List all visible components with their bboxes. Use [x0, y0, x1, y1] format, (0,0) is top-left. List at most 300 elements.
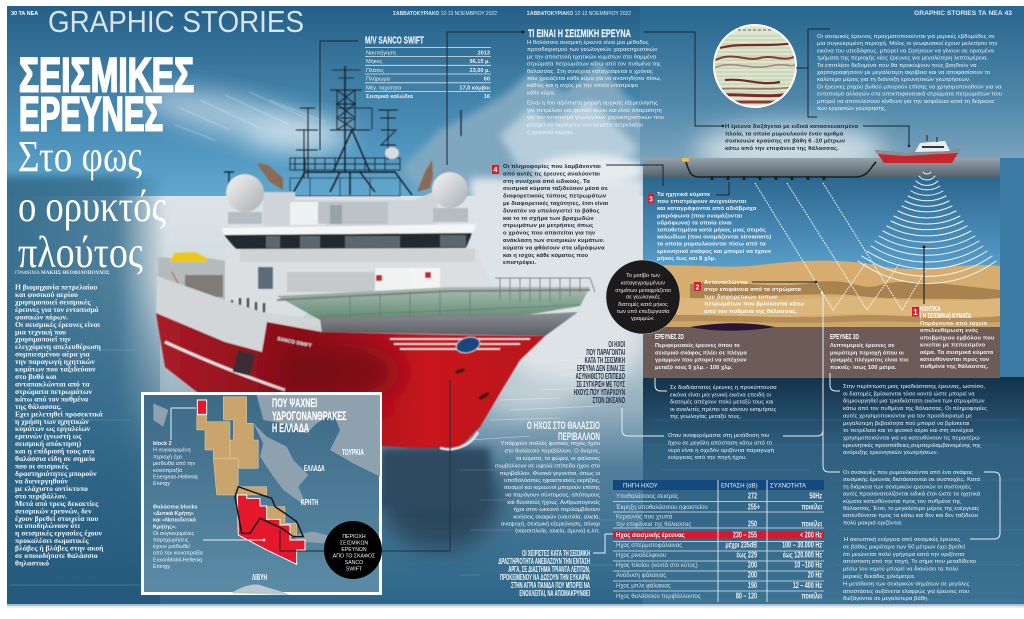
text block: seismic surveys duration: καλύτερο μέρος για τη διάνοιξη ερευνητικών γεωτρήσεων.	[817, 76, 971, 83]
bracket connector to circle	[796, 29, 830, 117]
left column intro text: να διενεργηθούν	[14, 476, 68, 485]
text block: sound sources in the sea: Υπάρχουν πολλές φυσικές πηγές ήχου	[501, 440, 600, 447]
text block: sound sources in the sea: υποθαλάσσιες ηφαιστειακές εκρήξεις,	[504, 477, 600, 484]
text block: sound sources in the sea: και δυνατούς ήχους. Ανθρωπογενείς	[507, 499, 600, 506]
step 1: sound waves	[912, 246, 996, 370]
map connectors	[171, 408, 196, 440]
text block: what is a seismic survey: με την αποστολή ηχητικών κυμάτων στα θαμμένα	[527, 53, 657, 60]
text block: what is a seismic survey: στρώματα πετρωμάτων κάτω από τον πυθμένα της	[527, 61, 661, 68]
step 3: hydrophones: υδρόφωνα) τα οποία είναι	[657, 220, 732, 226]
text block: what is a seismic survey: θάλασσας. Στη συνέχεια καταγράφεται ο χρόνος	[527, 68, 653, 75]
left column intro text: κάτω από τον πυθμένα	[15, 394, 89, 403]
step 4: information analysed: κύματα να φθάσουν στα υδρόφωνα	[503, 245, 605, 251]
left column intro text: ελεγχόμενη απελευθέρωση	[15, 342, 101, 351]
text block: seismic surveys duration: εικόνα του υπεδάφους, μπορεί να ζητήσουν να γίνουν σε ορισμένα	[817, 47, 994, 54]
stern decks with lifeboat	[158, 257, 232, 312]
left column intro text: στο βυθό και	[15, 372, 57, 381]
table: sound sources: 20 Hz	[808, 572, 822, 580]
text block: what is a seismic survey: για τον εντοπισμό γεωλογικών χαρακτηριστικών που	[527, 114, 664, 121]
text: 3D surveys explanation: ανόρυξης ερευνητικών γεωτρήσεων.	[843, 449, 939, 456]
text: 3D surveys explanation: το πετρέλαιο και το φυσικό αέριο και στη συνέχεια	[843, 427, 974, 434]
text: long-distance sound transmission: Οταν αναφερόμαστε στη μετάδοση του	[668, 432, 770, 439]
text block: sound sources in the sea: περιβάλλον. Φυσικά γεγονότα, όπως οι	[500, 470, 601, 477]
table: sound sources: 80 – 120	[736, 593, 757, 601]
map note: block 2: κοινοπραξία	[153, 468, 182, 474]
right funnel	[417, 160, 433, 192]
step 4: information analysed: με διαφορετικές ταχύτητες, έτσι είναι	[503, 201, 609, 207]
step 4: information analysed: δυνατόν να υπολογιστεί το βάθος	[503, 208, 600, 214]
step 1: sound waves: πυθμένα της θάλασσας.	[920, 364, 989, 370]
table: sound sources: έως 120.000 Hz	[783, 552, 822, 560]
step 2: reflections: πετρωμάτων που βρίσκονται κάτω	[704, 302, 804, 308]
text: acoustic energy: μέσω του νερού μπορεί να διανύσει τα πολύ	[843, 566, 958, 573]
map note: block 2: μισθωθεί από την	[153, 460, 195, 467]
panel: ship specs: Ναυπήγηση	[366, 50, 396, 56]
left column intro text: στο περιβάλλον.	[15, 491, 67, 500]
panel: ship specs: 60	[484, 76, 490, 82]
3D surveys label	[830, 333, 910, 371]
main title: ο ορυκτός	[18, 182, 166, 231]
left funnel	[258, 163, 283, 190]
step 4: information analysed: ο χρόνος που απαιτείται για την	[503, 231, 596, 237]
big ship photo illustration: SANCO SWIFT	[277, 336, 312, 349]
left column intro text: Η βιομηχανία πετρελαίου	[15, 282, 97, 292]
text block: sound sources in the sea: συμβάλλουν σε υψηλά επίπεδα ήχου στο	[495, 462, 600, 470]
step 4: information analysed	[492, 164, 663, 266]
3D surveys label: Λεπτομερείς έρευνες σε	[830, 343, 895, 349]
map title: Η ΕΛΛΑΔΑ	[272, 422, 309, 436]
left column intro text: με ελάχιστο αντίκτυπο	[15, 484, 88, 493]
text block: specially built vessels	[722, 124, 910, 152]
map title	[272, 397, 347, 436]
callout: black circle pattern of signals: γραμμών.	[631, 315, 655, 322]
left column intro text: βλάβες ή βλάβες στην ακοή	[15, 544, 103, 553]
text block: sound sources in the sea: στο θαλάσσιο περιβάλλον. Ο άνεμος,	[505, 448, 600, 454]
main title: Στο φως	[18, 132, 142, 181]
left column intro text: Εχει μελετηθεί προσεκτικά	[15, 409, 103, 418]
step 2: reflections: Αντανακλώνται	[704, 280, 748, 286]
text block: sound sources in the sea: να παράγουν σύντομους, απότομους	[505, 492, 600, 498]
table: sound sources: 200	[748, 572, 757, 580]
table: sound sources: ΕΝΤΑΣΗ (dB)	[721, 484, 758, 490]
step 4: information analysed: ανάκλαση των σεισμικών κυμάτων.	[503, 238, 605, 244]
step 4: information analysed: διαφορετικούς τύπους πετρωμάτων	[503, 194, 607, 200]
text: 2D surveys explanation	[670, 384, 778, 420]
map title: ΥΔΡΟΓΟΝΑΝΘΡΑΚΕΣ	[272, 410, 347, 424]
left column intro text: δραστηριότητες μπορούν	[15, 469, 97, 478]
text: acoustic energy: ότι μειώνεται πολύ γρήγορα κατά την οριζόντια	[843, 551, 965, 558]
panel: ship specs	[365, 34, 491, 100]
table: sound sources: την επιφάνεια της θάλασσας	[616, 521, 691, 528]
step 1: sound waves: Παράγονται από ταχεία	[920, 321, 988, 327]
panel: ship specs: M/V SANCO SWIFT	[365, 34, 424, 46]
table: sound sources: 12 – 400 Hz	[793, 582, 822, 590]
text: towed arrays: κατευθύνεται προς τα κάτω και δεν και δεν ταξιδεύει	[843, 512, 979, 519]
callout: operators ramp up: ΠΡΟΚΕΙΜΕΝΟΥ ΝΑ ΔΩΣΟΥΝ ΤΗΝ ΕΥΚΑΙΡΙΑ	[500, 574, 590, 582]
table: sound sources: Ηχος θαλάσσιου περιβάλλοντος	[616, 593, 701, 600]
map country labels	[252, 449, 364, 582]
step 4: information analysed: επιστρέφει.	[503, 260, 536, 266]
left column intro text: Οι σεισμικές έρευνες είναι	[15, 320, 101, 329]
table: sound sources: Ανάδυση φάλαινας	[616, 572, 666, 579]
left column intro text: στρώματα πετρωμάτων	[15, 387, 93, 396]
table: sound sources: Κεραυνός που χτυπά	[616, 514, 673, 520]
table: sound sources: ΠΗΓΗ ΗΧΟΥ	[623, 484, 658, 490]
text: acoustic energy: Η ακουστική ενέργεια από σεισμικές έρευνες	[844, 536, 961, 543]
map note: block 2: Energy	[153, 481, 170, 487]
table: sound sources: 200	[748, 562, 757, 570]
callout: noise levels: ΕΡΕΥΝΑ ΔΕΝ ΕΙΝΑΙ ΣΕ	[577, 365, 625, 373]
callout: noise levels: ΣΤΟΝ ΩΚΕΑΝΟ	[593, 397, 625, 405]
upper superstructure	[263, 190, 437, 226]
big ship photo illustration	[156, 66, 595, 449]
map note: block 2: Energean-Helleniq	[153, 474, 198, 480]
left column intro text: συμπιεσμένου αέρα για	[15, 350, 90, 359]
text block: seismic surveys duration: χαρτογραφήσουν με μεγαλύτερη ακρίβεια και να αποφασίσουν το	[817, 69, 991, 76]
table: sound sources: Ηχος σεισμικής έρευνας	[616, 533, 685, 539]
reflected sound paths	[755, 183, 926, 310]
step 2: reflections: από τον πυθμένα της θάλασσας.	[704, 309, 798, 315]
table: sound sources: μέχρι 235dB	[725, 542, 757, 550]
map note: block 2: περιοχή έχει	[153, 453, 183, 460]
table: sound sources: ΣΥΧΝΟΤΗΤΑ	[770, 484, 806, 490]
heading: sound in marine environment: Ο ΗΧΟΣ ΣΤΟ ΘΑΛΑΣΣΙΟ	[527, 419, 600, 431]
text block: what is a seismic survey: κάθε κύμα.	[527, 89, 556, 96]
table: sound sources: < 200 Hz	[800, 532, 822, 540]
map note: marine blocks: ExxonMobil-Helleniq	[153, 557, 202, 563]
text: 3D surveys explanation: κάτω από τον πυθμένα της θάλασσας. Οι πληροφορίες	[843, 405, 987, 412]
left column intro text: και η επίδρασή τους στα	[15, 447, 95, 456]
map title: ΠΟΥ ΨΑΧΝΕΙ	[272, 397, 317, 411]
text: acoustic energy: απόσταση από την πηγή. Το σήμα που μεταδίδεται	[843, 558, 977, 565]
diagram: seismic survey cross-section	[643, 158, 1000, 378]
text: 2D surveys explanation: εικόνα είναι μια γενική εικόνα επειδή οι	[670, 391, 772, 398]
step 1: sound waves: 1	[913, 308, 918, 317]
step 3: hydrophones	[648, 182, 773, 262]
callout: survey area circle: SANCO	[345, 560, 363, 566]
step 2: reflections	[694, 280, 817, 315]
left column intro text: σεισμικών ερευνών, δεν	[15, 506, 92, 515]
orange licence blocks	[197, 397, 297, 537]
text: towed arrays: αυτές προσανατολίζονται ειδικά έτσι ώστε τα ηχητικά	[843, 491, 981, 498]
text block: sound sources in the sea: κινήσεις σκαφών (ναυτιλία, αλιεία,	[513, 514, 600, 520]
2D surveys label: γραμμών που μπορεί να απέχουν	[655, 358, 747, 364]
callout: survey area circle: ΣΕΙΣΜΙΚΩΝ	[340, 540, 368, 546]
sea surface band	[643, 158, 1000, 180]
text block: seismic surveys duration: των εργασιών γεώτρησης.	[817, 105, 887, 112]
text block: sound sources in the sea: σεισμοί και κεραυνοί μπορούν επίσης	[504, 485, 600, 491]
byline: ΓΡΑΦΗΜΑ ΜΑΚΗΣ ΘΕΟΦΙΛΟΠΟΥΛΟΣ	[15, 270, 110, 276]
left column intro text: θηλαστικό	[15, 559, 49, 568]
text block: what is a seismic survey	[522, 28, 666, 136]
bridge and windows	[222, 224, 477, 236]
callout: noise levels: ΚΑΤΑ ΤΗ ΣΕΙΣΜΙΚΗ	[585, 357, 625, 365]
text: towed arrays: τη διάρκεια των σεισμικών ερευνών οι συστοιχίες	[843, 483, 971, 490]
callout: noise levels: ΣΕ ΣΥΓΚΡΙΣΗ ΜΕ ΤΟΥΣ	[576, 381, 625, 389]
callout: black circle pattern of signals: διατομές κατά μήκος	[618, 301, 668, 308]
text block: what is a seismic survey: που χρειάζεται κάθε κύμα για να αναπηδήσει πίσω,	[527, 75, 662, 82]
table: sound sources: Ηχος ρινοδέλφινου	[616, 552, 666, 559]
text block: seismic surveys duration: Τα επιπλέον δεδομένα που θα προκύψουν τους βοηθούν να	[817, 62, 977, 69]
callout: operators ramp up	[498, 550, 590, 598]
map country labels: ΚΡΗΤΗ	[301, 499, 318, 507]
table: sound sources: έως 229	[737, 552, 757, 560]
panel: ship specs: 16	[484, 94, 490, 100]
step 2: reflections: στην επιφάνεια από τα στρώματα	[704, 287, 801, 293]
callout: survey area circle: ΕΡΕΥΝΩΝ	[341, 547, 367, 553]
red hull	[156, 313, 545, 448]
helideck	[277, 287, 590, 320]
callout: black circle pattern of signals: σε γεωλογικές	[626, 294, 661, 300]
callout: operators ramp up: ΑΡΓΑ, ΣΕ ΔΙΑΣΤΗΜΑ ΤΡΙΑΝΤΑ ΛΕΠΤΩΝ,	[508, 566, 590, 574]
text: 2D surveys explanation: της γεωλογίας μεταξύ τους.	[670, 414, 742, 420]
text: 3D surveys explanation: ερευνητικές προσπάθειες,συμπεριλαμβανομένης της	[843, 442, 981, 449]
text block: sound sources in the sea: (ναυσιπλοΐα, αλιεία, άμυνα) κ.λπ.	[515, 528, 600, 534]
table: sound sources: 100 – 30.000 Hz	[782, 542, 822, 550]
text block: what is a seismic survey: μπορεί να περιέχουν κοιτάσματα πετρελαίου	[527, 122, 643, 129]
step 4: information analysed: και η ισχύς κάθε κύματος που	[503, 253, 589, 259]
sound waves	[858, 172, 996, 284]
page header: GRAPHIC STORIES	[48, 4, 304, 39]
text block: specially built vessels: πλοία, τα οποία ρυμουλκούν έναν αριθμό	[725, 131, 844, 137]
left column intro text: της θάλασσας.	[15, 402, 62, 411]
panel: ship specs: 2013	[478, 50, 490, 56]
step 2: reflections: 2	[696, 284, 700, 292]
text: acoustic energy: Η μετάδοση των σεισμικών σημάτων σε μεγάλες	[843, 580, 970, 587]
text block: what is a seismic survey: Η θαλάσσια σεισμική έρευνα είναι μια μέθοδος	[527, 39, 649, 46]
table: sound sources: Ηχος σπερματοφάλαινας	[616, 542, 682, 549]
map note: marine blocks: «Δυτικά Κρήτη»	[153, 511, 194, 517]
left column intro text: θαλάσσια είδη σε σημείο	[15, 454, 95, 463]
small survey ship	[875, 135, 961, 163]
text block: specially built vessels: συσκευών κραύσης σε βάθη 6 -10 μέτρων	[725, 139, 846, 145]
main title: ΣΕΙΣΜΙΚΕΣ	[19, 50, 194, 102]
callout: noise levels: ΗΧΟΥΣ ΠΟΥ ΥΠΑΡΧΟΥΝ	[574, 389, 625, 397]
text block: sound sources in the sea	[495, 440, 601, 534]
text: 2D surveys explanation: διατομές απέχουν πολύ μεταξύ τους και	[670, 399, 774, 406]
map country labels: ΛΙΒΥΗ	[252, 574, 267, 582]
step 1: sound waves: απελευθέρωση ενός	[920, 328, 978, 334]
step 4: information analysed: 4	[494, 167, 498, 174]
left column intro text: ερευνών (γνωστή ως	[15, 432, 82, 441]
callout: survey area circle: SWIFT	[346, 566, 363, 572]
step 3: hydrophones: μήκος έως και 8 χλμ.	[657, 256, 717, 262]
left column intro text: η χρήση των ηχητικών	[15, 417, 89, 426]
leader lines around the explanation	[447, 32, 722, 165]
table: sound sources: 10 –100 Hz	[794, 562, 822, 570]
left column intro text: και φυσικού αερίου	[15, 290, 78, 299]
callout: operators ramp up: ΔΡΑΣΤΗΡΙΟΤΗΤΑ ΑΝΕΒΑΖΟΥΝ ΤΗΝ ΕΝΤΑΣΗ	[498, 558, 590, 566]
map note: marine blocks: Θαλάσσια blocks	[153, 504, 198, 510]
water column	[643, 178, 1000, 270]
text block: what is a seismic survey: προσδιορισμού των γεωλογικών χαρακτηριστικών	[527, 47, 658, 53]
domes	[226, 174, 264, 212]
text: 3D surveys explanation: αυτές χρησιμοποιούνται για τον προσδιορισμό με	[843, 412, 972, 419]
map note: marine blocks: Energy	[153, 564, 170, 570]
table: sound sources: 190	[748, 582, 757, 590]
text: 3D surveys explanation: οι διατομές βρίσκονται τόσο κοντά ώστε μπορεί να	[843, 390, 975, 397]
text block: sound sources in the sea: τα κύματα, τα φώρια, οι φάλαινες	[516, 455, 600, 462]
2D surveys label: Περιφερειακές έρευνες όπου το	[655, 343, 740, 349]
text: long-distance sound transmission	[668, 432, 776, 461]
left column intro text: σεισμική απόκτηση)	[15, 439, 82, 448]
left column intro text: έρευνες για τον εντοπισμό	[15, 305, 99, 314]
table: sound sources: ποικίλει	[802, 519, 822, 529]
left column intro text: η σεισμικές εργασίες έχουν	[15, 529, 102, 538]
table: sound sources: 230 – 255	[733, 532, 757, 540]
page header	[11, 4, 1012, 39]
page header: 30 ΤΑ ΝΕΑ	[11, 11, 38, 17]
table: sound sources	[613, 480, 824, 602]
map note: marine blocks: Οι συγκεκριμένες	[153, 530, 195, 537]
leader line: survey area to ship	[382, 380, 450, 551]
text: acoustic energy: σε βάθος μικρότερο των 50 μέτρων έχει βρεθεί	[843, 543, 966, 550]
page header: GRAPHIC STORIES ΤΑ ΝΕΑ 43	[914, 10, 1012, 17]
text: towed arrays: πολύ μακριά οριζόντια.	[843, 519, 903, 526]
panel: ship specs: Πλήρωμα	[366, 76, 391, 82]
step 3: hydrophones: τοποθετημένα κατά μήκος μιας σειράς	[657, 228, 766, 234]
text block: what is a seismic survey: ή φυσικού αερίου.	[527, 129, 574, 136]
callout: operators ramp up: ΣΤΗΝ ΑΓΡΙΑ ΠΑΝΙΔΑ ΠΟΥ ΜΠΟΡΕΙ ΝΑ	[511, 582, 590, 590]
panel: ship specs: 23,00 μ.	[469, 68, 490, 74]
step 4: information analysed: στη συνέχεια από ειδικούς. Τα	[503, 179, 590, 185]
callout: black circle pattern of signals: των υπό επεξεργασία	[617, 308, 670, 315]
step 1: sound waves: ( Η ΣΕΙΣΜΙΚΑ) ΚΥΜΑΤΑ	[920, 312, 972, 320]
text block: what is a seismic survey: ΤΙ ΕΙΝΑΙ Η ΣΕΙΣΜΙΚΗ ΕΡΕΥΝΑ	[528, 28, 631, 39]
step 3: hydrophones: τα οποία ρυμουλκούνται πίσω από τα	[657, 242, 766, 248]
left column intro text: χρησιμοποιεί την	[14, 335, 71, 344]
sea floor layers	[643, 261, 1000, 378]
table: sound sources: 272	[748, 493, 757, 501]
text block: seismic surveys duration: εντοπισμό αλλαγών στα υποεπιφανειακά στρώματα πετρωμάτων που	[817, 91, 1002, 98]
heading: sound in marine environment	[527, 419, 600, 442]
3D surveys label: πυκνές- ίσως 100 μέτρα.	[830, 365, 897, 371]
callout: survey area circle	[324, 521, 382, 579]
step 4: information analysed: Οι πληροφορίες που λαμβάνονται	[503, 164, 601, 170]
step 3: hydrophones: που επιστρέφουν ανιχνεύονται	[657, 199, 747, 205]
text: acoustic energy	[843, 536, 978, 602]
left column intro text: κυμάτων που ταξιδεύουν	[15, 365, 96, 374]
callout: black circle pattern of signals: καταγεγραμμένων	[621, 280, 665, 286]
step 3: hydrophones: ερευνητικό σκάφος και μπορεί να έχουν	[657, 249, 772, 255]
text: long-distance sound transmission: νερό είναι η σχεδόν οριζόντια παραγωγή	[668, 447, 774, 454]
left column intro text: κυμάτων ως εργαλείων	[15, 424, 91, 433]
callout: black circle pattern of signals	[606, 260, 680, 334]
leader line: mast to ship specs	[320, 41, 358, 150]
2D surveys label	[655, 333, 748, 371]
main title: πλούτος	[18, 228, 143, 277]
callout: noise levels: ΟΙ ΗΧΟΙ	[608, 341, 625, 349]
table: sound sources: Ηχος μπλε φάλαινας	[616, 582, 671, 590]
2D surveys label: μεταξύ τους 5 χλμ. - 100 χλμ.	[655, 365, 733, 371]
panel: ship specs: Μέγ. ταχύτητα	[366, 84, 402, 92]
white hull side	[156, 276, 322, 352]
step 4: information analysed: από αυτές τις έρευνες αναλύονται	[503, 171, 600, 177]
heading: sound in marine environment: ΠΕΡΙΒΑΛΛΟΝ	[558, 430, 600, 442]
step 3: hydrophones: μικρόφωνα (που ονομάζονται	[657, 213, 743, 219]
2D surveys label: σεισμικό σκάφος πλέει σε πλέγμα	[655, 350, 747, 356]
text: long-distance sound transmission: ήχου σε μεγάλη απόσταση κάτω από το	[668, 439, 772, 446]
text: 3D surveys explanation: δημιουργηθεί μια τριαδιάστατη εικόνα των στρωμάτων	[843, 398, 985, 405]
red licence blocks	[197, 400, 305, 564]
callout: black circle pattern of signals: σημάτων μεταφράζεται	[615, 287, 672, 294]
3D surveys label: ΕΡΕΥΝΕΣ 3D	[830, 333, 859, 341]
text: 3D surveys explanation: Στην περίπτωση μιας τριαδιάστατης έρευνας, ωστόσο,	[843, 383, 985, 390]
left column intro text: χρησιμοποιεί σεισμικές	[14, 297, 91, 306]
map note: marine blocks: και «Νοτιοδυτικά	[153, 518, 197, 524]
text block: seismic surveys duration	[817, 33, 1004, 112]
text: 3D surveys explanation: μεγαλύτερη βεβαιότητα πού μπορεί να βρίσκεται	[843, 420, 970, 427]
grey hull band	[320, 312, 578, 336]
streamer cable with hydrophones	[682, 158, 876, 180]
text: long-distance sound transmission: ενέργειας από την πηγή ήχου.	[668, 454, 747, 461]
map note: block 2: block 2	[153, 441, 172, 447]
3D surveys label: γραμμές πλέγματος είναι πιο	[830, 358, 909, 364]
2D surveys label: ΕΡΕΥΝΕΣ 2D	[655, 333, 684, 341]
text block: what is a seismic survey: Είναι η πιο αξιόπιστη μορφή αρχικής εξερεύνησης	[527, 99, 658, 106]
page header: ΣΑΒΒΑΤΟΚΥΡΙΑΚΟ 12-13 ΝΟΕΜΒΡΙΟΥ 2022	[527, 11, 631, 17]
text: 3D surveys explanation	[843, 383, 989, 456]
step 3: hydrophones: 3	[649, 196, 653, 204]
text block: seismic surveys duration: μπορεί να αποτελέσουν κίνδυνο για την ασφάλεια κατά τη διάρκεια	[817, 98, 994, 105]
table: sound sources: ποικίλει	[802, 502, 822, 512]
step 4: information analysed: και το το σχήμα των βραχωδών	[503, 216, 594, 222]
text: towed arrays: Οι συσκευές που ρυμουλκούνται από ένα σκάφος	[843, 469, 973, 476]
panel: map of Greek hydrocarbon blocks	[142, 394, 380, 595]
text block: sound sources in the sea: αναψυχή, σεισμική εξερεύνηση, σόναρ	[501, 520, 601, 528]
callout: operators ramp up: ΟΙ ΧΕΙΡΙΣΤΕΣ ΚΑΤΑ ΤΗ ΣΕΙΣΜΙΚΗ	[522, 550, 590, 558]
map note: marine blocks: από την κοινοπραξία	[153, 550, 203, 557]
text: 3D surveys explanation: χρησιμοποιούνται για να κατευθύνουν τις περαιτέρω	[843, 434, 980, 441]
main title: ΕΡΕΥΝΕΣ	[19, 88, 163, 142]
step 3: hydrophones: καλωδίων (που ονομάζονται streamers)	[657, 235, 771, 241]
left column intro text: σε οποιοδήποτε θαλάσσιο	[15, 551, 98, 560]
callout: operators ramp up: ΕΝΟΧΛΕΙΤΑΙ, ΝΑ ΑΠΟΜΑΚΡΥΝΘΕΙ	[519, 590, 590, 598]
step 1: sound waves: κινείται με πεπιεσμένο	[920, 343, 986, 349]
left column intro text: Μετά από τρεις δεκαετίες	[15, 499, 99, 508]
table: sound sources: 50Hz	[809, 493, 822, 501]
step 4: information analysed: σεισμικά κύματα ταξιδεύουν μέσα σε	[503, 186, 608, 192]
text block: specially built vessels: κάτω από την επιφάνεια της θάλασσας.	[725, 146, 839, 152]
step 3: hydrophones: Τα ηχητικά κύματα	[657, 192, 710, 198]
text: towed arrays: σεισμικής έρευνας διατάσσονται σε συστοιχίες. Κατά	[843, 476, 981, 483]
callout: noise levels	[574, 341, 625, 405]
text block: seismic surveys duration: τμήματα της περιοχής νέες έρευνες για μεγαλύτερη λεπτομέρεια.	[817, 55, 988, 62]
step 4: information analysed: στρωμάτων με μετρήσεις όπως	[503, 223, 593, 229]
map note: block 2: Η συγκεκριμένη	[153, 447, 191, 454]
panel: ship specs: 96,15 μ.	[469, 59, 490, 65]
panel: ship specs: Πλάτος	[366, 67, 384, 74]
text: acoustic energy: μερικές δεκάδες χιλιόμετρα.	[843, 573, 916, 580]
step 2: reflections: των διαφορετικών τύπων	[704, 294, 778, 300]
text: towed arrays	[843, 469, 982, 526]
text: acoustic energy: διεξάγονται σε μεγαλύτερα βάθη.	[843, 595, 929, 602]
text: 2D surveys explanation: οι αναλυτές πρέπει να κάνουν εκτιμήσεις	[670, 406, 776, 413]
map note: marine blocks: παραχωρήσεις	[153, 536, 189, 544]
panel: ship specs: 17,0 κόμβοι	[459, 86, 490, 92]
step 1: sound waves: ΗΧΗΤΙΚΑ	[920, 305, 941, 313]
text block: specially built vessels: Η έρευνα διεξάγεται με ειδικά κατασκευασμένα	[725, 124, 859, 130]
left column intro text: που οι σεισμικές	[15, 462, 69, 471]
left column intro text: φυσικών πόρων.	[15, 312, 68, 321]
text block: sound sources in the sea: ήχοι στον ωκεανό περιλαμβάνουν	[514, 506, 600, 513]
main title	[18, 50, 194, 277]
table: sound sources: 250	[748, 521, 757, 529]
map country labels: ΤΟΥΡΚΙΑ	[342, 449, 364, 457]
ship mast	[224, 66, 461, 198]
text block: seismic surveys duration: μια συγκεκριμένη περιοχή. Μόλις οι γεωφυσικοί έχουν μελετήσει την	[817, 40, 997, 47]
left column intro text: έχουν βρεθεί στοιχεία που	[15, 514, 98, 523]
